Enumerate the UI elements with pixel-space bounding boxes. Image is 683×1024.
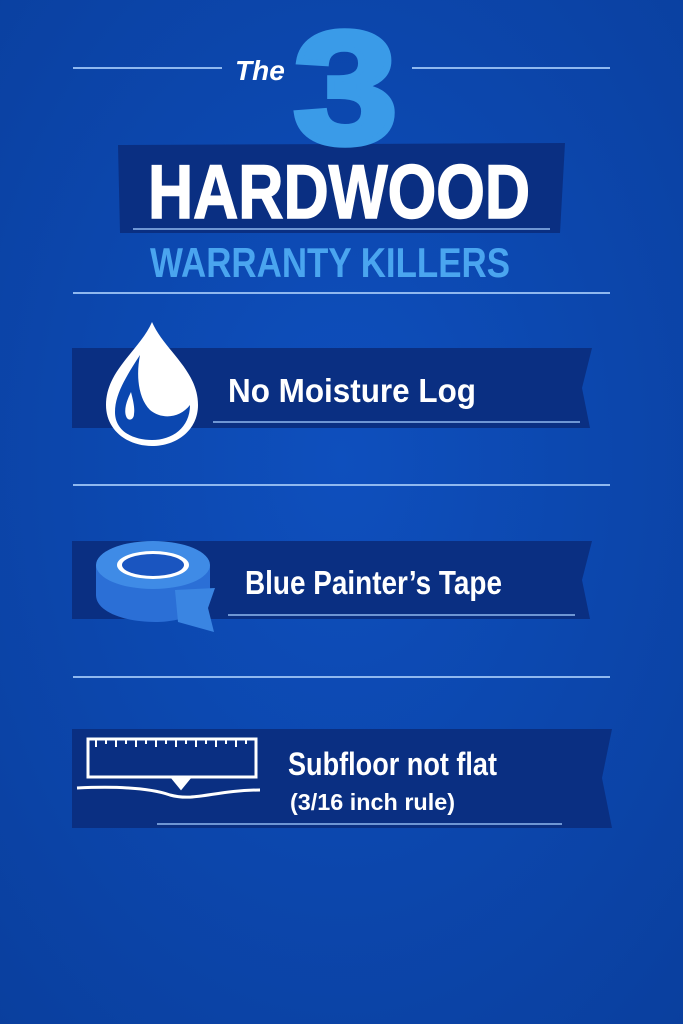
icon: tape roll	[96, 541, 215, 632]
title banner	[118, 143, 565, 233]
panel: blue painter's tape	[72, 541, 592, 632]
icon: water drop	[106, 322, 198, 446]
text: Blue Painter's Tape: Blue Painter’s Tape	[245, 564, 502, 601]
title: WARRANTY KILLERS: WARRANTY KILLERS	[150, 239, 510, 286]
text: 3/16 inch rule: (3/16 inch rule)	[290, 789, 455, 815]
text: No Moisture Log: No Moisture Log	[228, 372, 476, 409]
title: The: The	[235, 55, 285, 86]
icon: ruler and wavy floor	[77, 739, 260, 797]
title: HARDWOOD: HARDWOOD	[148, 150, 530, 235]
panel: subfloor not flat	[72, 729, 612, 828]
title: big 3: 3	[293, 0, 398, 177]
panel: no moisture log	[72, 322, 592, 446]
text: Subfloor not flat: Subfloor not flat	[288, 746, 497, 782]
title	[118, 0, 565, 286]
